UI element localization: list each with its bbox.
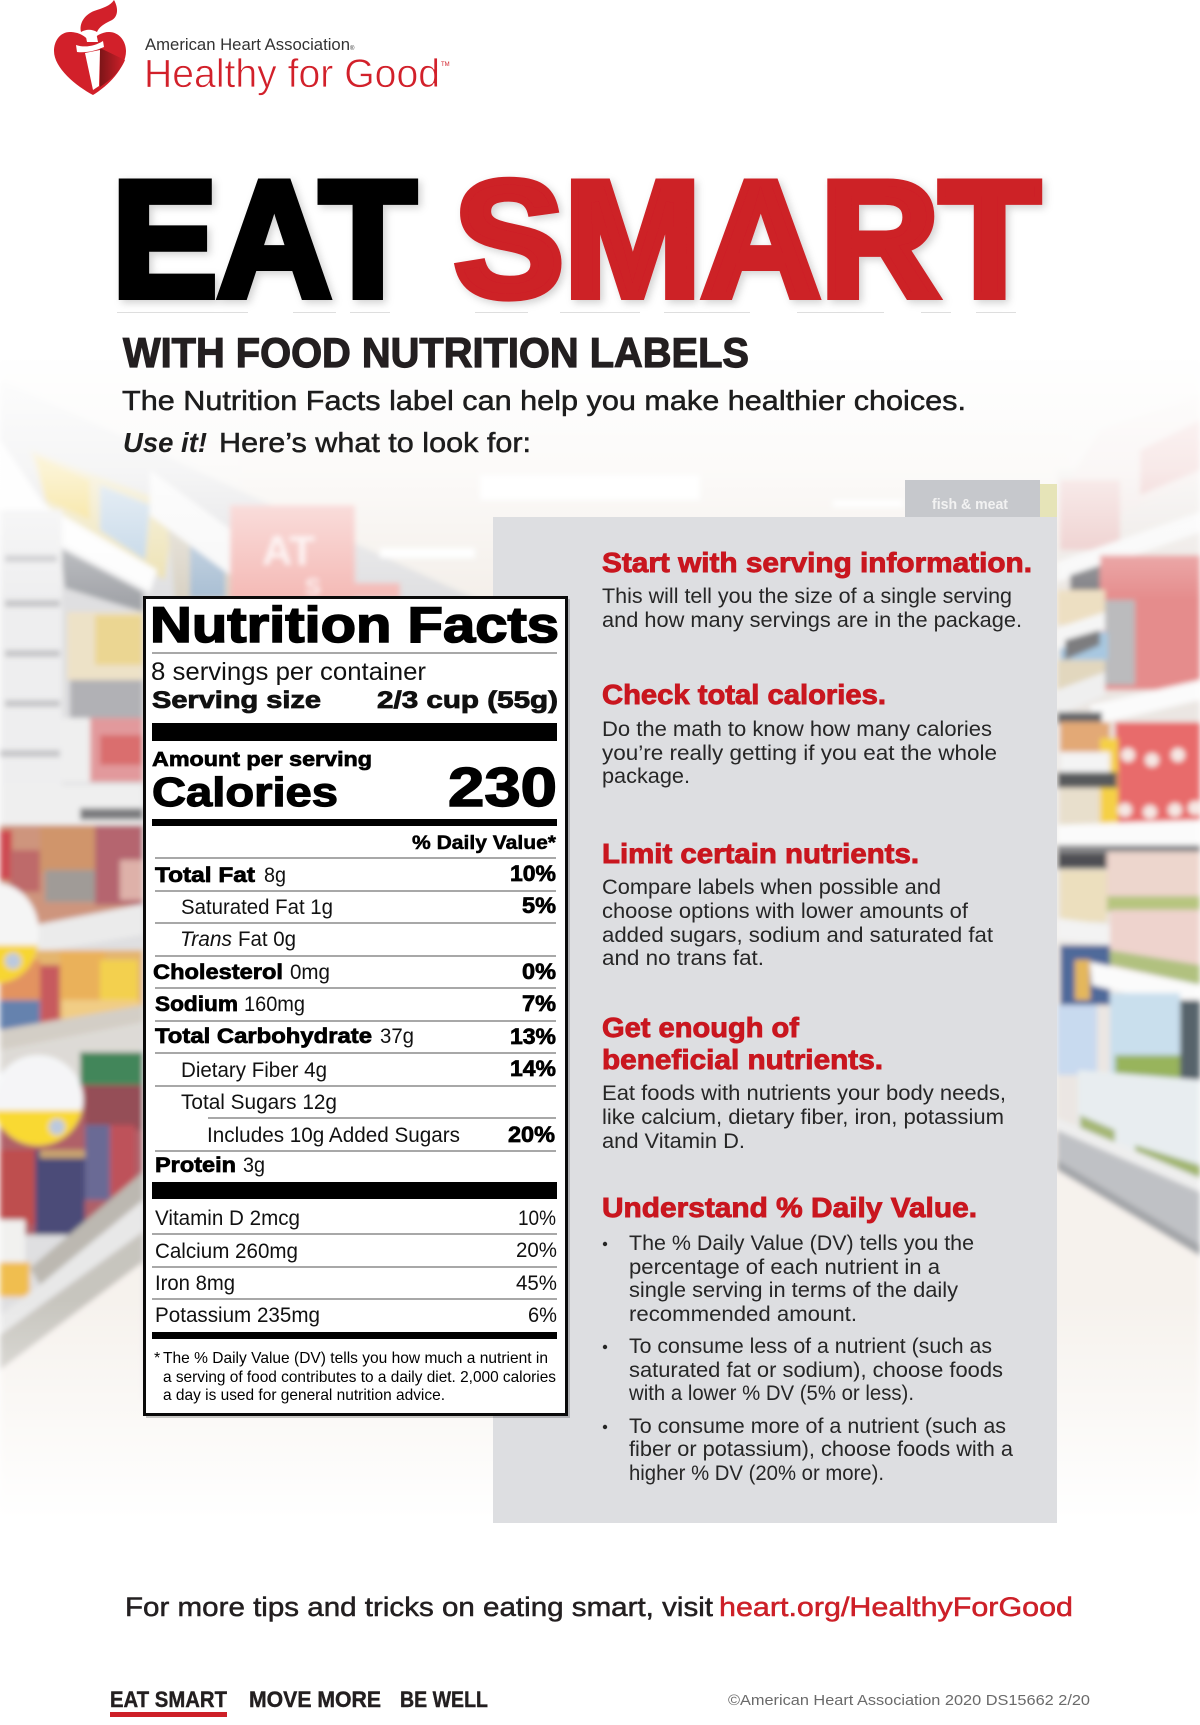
row: total fat: Total Fat [155, 864, 255, 887]
tip: beneficial nutrients: beneficial nutrients. [602, 1044, 883, 1075]
row: cholesterol: 0% [522, 959, 556, 984]
subtitle: WITH FOOD NUTRITION LABELS [123, 329, 749, 376]
footer navigation: BE WELL [400, 1687, 488, 1712]
tip: beneficial nutrients: like calcium, dietary fiber, iron, potassium [602, 1106, 1004, 1129]
row: total carbohydrate [155, 1024, 556, 1049]
tip: beneficial nutrients: and Vitamin D. [602, 1130, 745, 1153]
row: saturated fat: Saturated Fat 1g [181, 896, 333, 919]
row: sodium: 7% [522, 991, 556, 1016]
calories [152, 749, 557, 818]
row: iron: Iron 8mg [155, 1272, 235, 1295]
row: trans fat: Trans [180, 928, 232, 951]
row: trans fat: Fat 0g [238, 928, 296, 951]
row: trans fat [180, 928, 296, 951]
tip: beneficial nutrients: Get enough of [602, 1012, 800, 1043]
row: total carbohydrate: 37g [380, 1025, 414, 1048]
footer navigation [110, 1687, 488, 1717]
tip: percent daily value: The % Daily Value (DV) tells you the [629, 1232, 974, 1255]
intro call to action: Use it! [123, 427, 207, 458]
row: added sugars: 20% [508, 1122, 555, 1147]
servings [151, 658, 558, 714]
row: iron: 45% [516, 1272, 557, 1295]
shopping sign circles [0, 883, 39, 983]
row: vitamin D: Vitamin D 2mcg [155, 1207, 300, 1230]
product name: Healthy for Good [144, 52, 440, 96]
row: saturated fat: 5% [522, 893, 556, 918]
aisle sign text in background: S [305, 574, 321, 601]
row: sodium: Sodium [155, 993, 238, 1016]
tip: beneficial nutrients: Eat foods with nutrients your body needs, [602, 1082, 1006, 1105]
trademark: TM [441, 62, 450, 68]
title: EAT SMART [112, 147, 1040, 331]
tip: serving information: and how many servings are in the package. [602, 609, 1022, 632]
tip: limit nutrients: and no trans fat. [602, 947, 764, 970]
row: calcium: Calcium 260mg [155, 1240, 298, 1263]
tip: percent daily value: saturated fat or sodium), choose foods [629, 1359, 1003, 1382]
label title: Nutrition Facts [150, 597, 559, 653]
bottom white fade [0, 1300, 1200, 1520]
tip: percent daily value: percentage of each nutrient in a [629, 1256, 940, 1279]
tip: limit nutrients: added sugars, sodium and saturated fat [602, 924, 993, 947]
copyright: ©American Heart Association 2020 DS15662 2/20 [728, 1692, 1090, 1709]
row: potassium: 6% [528, 1304, 557, 1327]
tip: limit nutrients: choose options with lower amounts of [602, 900, 968, 923]
tip: percent daily value: single serving in terms of the daily [629, 1279, 959, 1302]
daily value header: % Daily Value* [412, 833, 557, 854]
row: cholesterol: Cholesterol [153, 961, 283, 984]
row: potassium [155, 1304, 557, 1327]
row: total fat: 8g [264, 864, 286, 887]
row: sodium: 160mg [244, 993, 305, 1016]
row: cholesterol: 0mg [290, 961, 330, 984]
calories: Calories [152, 769, 338, 815]
tip: total calories [602, 679, 997, 788]
right aisle shelves [1057, 470, 1200, 1170]
row: sodium [155, 991, 556, 1016]
top white fade [0, 340, 1200, 600]
wordmark: American Heart Association [145, 35, 350, 54]
tip: percent daily value: Understand % Daily Value. [602, 1192, 977, 1223]
label footnote [154, 1350, 556, 1404]
row: dietary fiber: Dietary Fiber 4g [181, 1059, 327, 1082]
row: protein: 3g [243, 1154, 265, 1177]
tip: total calories: Do the math to know how many calories [602, 718, 992, 741]
servings: Serving size [152, 687, 321, 714]
tip: percent daily value [602, 1192, 1013, 1485]
tip: percent daily value: higher % DV (20% or more). [629, 1462, 884, 1485]
row: added sugars: Includes 10g Added Sugars [207, 1124, 460, 1147]
row: total carbohydrate: 13% [510, 1024, 556, 1049]
row: iron [155, 1272, 557, 1295]
title: EAT SMART: EAT [112, 147, 416, 331]
servings: 2/3 cup (55g) [377, 687, 558, 714]
panel: nutrition facts label [144, 597, 570, 1418]
intro sentence: The Nutrition Facts label can help you make healthier choices. [122, 385, 966, 416]
tip: serving information: This will tell you the size of a single serving [602, 585, 1012, 608]
label footnote: a serving of food contributes to a daily diet. 2,000 calories [163, 1369, 556, 1386]
tip: serving information: Start with serving information. [602, 547, 1032, 578]
row: vitamin D: 10% [518, 1207, 556, 1230]
tip: total calories: package. [602, 765, 690, 788]
row: total fat [155, 861, 556, 887]
tip: percent daily value: To consume more of a nutrient (such as [629, 1415, 1006, 1438]
tip: total calories: Check total calories. [602, 679, 886, 710]
title: EAT SMART: SMART [454, 147, 1040, 331]
tip: total calories: you’re really getting if you eat the whole [602, 742, 997, 765]
tip: percent daily value: recommended amount. [629, 1303, 857, 1326]
tip: limit nutrients: Compare labels when possible and [602, 876, 941, 899]
aisle sign: fish and meat tab: fish & meat [932, 496, 1008, 513]
tip: serving information [602, 547, 1032, 632]
tip: percent daily value: fiber or potassium), choose foods with a [629, 1438, 1013, 1461]
icon: heart and torch [54, 0, 126, 95]
row: total sugars: Total Sugars 12g [181, 1091, 337, 1114]
left aisle: upper shelves [0, 380, 500, 1400]
intro call to action [123, 427, 531, 458]
tip: limit nutrients [602, 838, 993, 970]
rear wall sign [230, 505, 355, 600]
tip: limit nutrients: Limit certain nutrients. [602, 838, 919, 869]
aisle sign text in background [262, 527, 321, 601]
row: total carbohydrate: Total Carbohydrate [155, 1025, 372, 1048]
call to action: heart.org/HealthyForGood [719, 1592, 1073, 1622]
servings: 8 servings per container [151, 658, 426, 686]
row: added sugars [207, 1122, 555, 1147]
calories: Amount per serving [152, 749, 372, 771]
logo: American Heart Association Healthy for Good [54, 0, 450, 96]
row: total fat: 10% [510, 861, 556, 886]
panel: how to read the label [493, 517, 1057, 1523]
label footnote: The % Daily Value (DV) tells you how much a nutrient in [163, 1350, 548, 1367]
call to action [125, 1592, 1073, 1622]
row: protein [155, 1154, 265, 1177]
aisle sign: fish and meat tab [905, 480, 1057, 517]
call to action: For more tips and tricks on eating smart, visit [125, 1592, 714, 1622]
row: calcium [155, 1239, 557, 1263]
row: protein: Protein [155, 1154, 236, 1177]
label footnote: * [154, 1350, 160, 1367]
tip: percent daily value: with a lower % DV (5% or less). [628, 1382, 914, 1405]
label footnote: a day is used for general nutrition advice. [163, 1387, 445, 1404]
tip: beneficial nutrients [602, 1012, 1006, 1153]
row: saturated fat [181, 893, 556, 919]
row: vitamin D [155, 1207, 556, 1230]
row: calcium: 20% [516, 1239, 557, 1262]
row: cholesterol [153, 959, 556, 984]
registered mark: ® [350, 45, 355, 52]
calories: 230 [448, 756, 557, 818]
row: dietary fiber [181, 1056, 556, 1082]
footer navigation: MOVE MORE [249, 1687, 381, 1712]
row: potassium: Potassium 235mg [155, 1304, 320, 1327]
aisle sign text in background: AT [262, 527, 315, 574]
tip: percent daily value: To consume less of a nutrient (such as [629, 1335, 992, 1358]
intro call to action: Here’s what to look for: [219, 427, 531, 458]
row: dietary fiber: 14% [510, 1056, 556, 1081]
left aisle: lower shelves [0, 785, 143, 827]
footer navigation: EAT SMART [110, 1687, 228, 1712]
